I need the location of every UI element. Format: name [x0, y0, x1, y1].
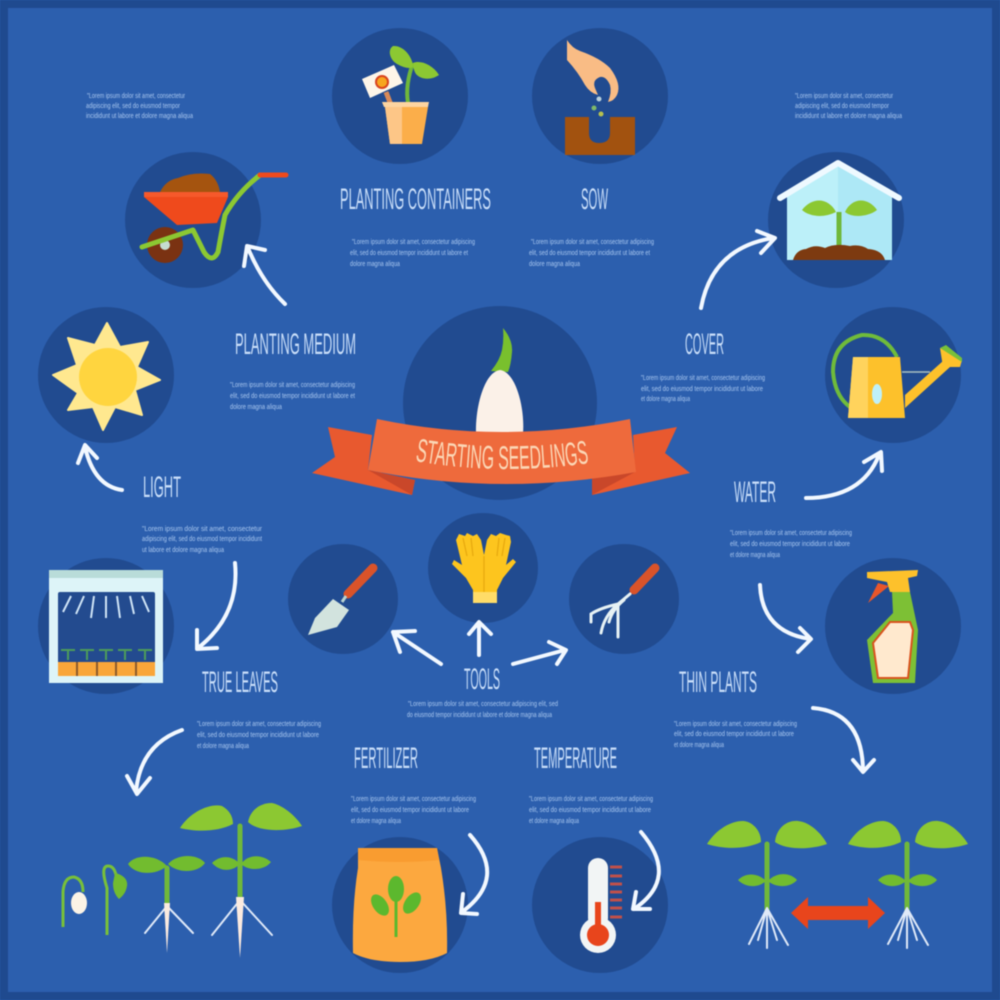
- text block: temperature: elit, sed do eiusmod tempor incididunt ut labore: [529, 807, 651, 814]
- text block: true leaves: "Lorem ipsum dolor sit amet, consectetur adipiscing: [197, 721, 321, 728]
- text: TEMPERATURE: [534, 742, 617, 775]
- panel: sow: [529, 28, 668, 268]
- panel: growth stages of seedling: [63, 803, 302, 958]
- panel: trowel: [288, 544, 398, 654]
- text block: cover: [641, 375, 765, 403]
- text: THIN PLANTS: [679, 666, 757, 699]
- icon: sprout with folded leaf: [104, 866, 127, 935]
- text block: water: "Lorem ipsum dolor sit amet, consectetur adipiscing: [730, 530, 852, 537]
- panel: gloves: [428, 513, 538, 623]
- text block: planting medium: dolore magna aliqua: [230, 404, 282, 411]
- icon: sun: [53, 323, 160, 430]
- icon: gloves: [452, 533, 516, 603]
- panel: centre title: [312, 306, 690, 500]
- text block: planting medium: elit, sed do eiusmod tempor incididunt ut labore et: [230, 393, 355, 400]
- text block: top right: adipiscing elit, sed do eiusmod tempor: [795, 103, 890, 110]
- text block: fertilizer: elit, sed do eiusmod tempor incididunt ut labore: [351, 807, 469, 814]
- panel: watering can: [825, 307, 962, 443]
- arrow: tools to trowel: [393, 631, 441, 664]
- text block: top left: "Lorem ipsum dolor sit amet, consectetur: [87, 93, 186, 100]
- icon: fertilizer bag: [353, 848, 447, 962]
- panel: thermometer: [532, 837, 668, 973]
- text block: thin plants: et dolore magna aliqua: [674, 742, 724, 749]
- text block: fertilizer: [351, 796, 476, 825]
- banner: left tail: [312, 427, 415, 495]
- panel: sun: [38, 307, 174, 443]
- text: PLANTING MEDIUM: [235, 328, 356, 361]
- arrow: light to true leaves: [197, 563, 236, 649]
- arrow: temperature: [633, 832, 659, 909]
- text block: water: et dolore magna aliqua: [730, 552, 780, 559]
- text: TOOLS: [464, 663, 500, 696]
- arrow: thin plants: [813, 708, 874, 772]
- text block: fertilizer: "Lorem ipsum dolor sit amet, consectetur adipiscing: [351, 796, 476, 803]
- text block: planting medium: "Lorem ipsum dolor sit amet, consectetur adipiscing: [230, 382, 355, 389]
- banner: ribbon: [368, 419, 636, 484]
- text block: true leaves: et dolore magna aliqua: [197, 743, 249, 750]
- icon: sprouting seed: [476, 328, 523, 434]
- text block: temperature: [529, 796, 653, 825]
- text: PLANTING CONTAINERS: [340, 183, 491, 216]
- banner: right tail: [592, 427, 690, 495]
- icon: mature seedling: [180, 803, 302, 958]
- text block: light: [142, 526, 263, 554]
- arrow: water to can: [806, 452, 882, 498]
- arrow: medium to wheelbarrow: [244, 246, 285, 304]
- icon: wheelbarrow: [142, 174, 286, 263]
- text block: temperature: "Lorem ipsum dolor sit amet, consectetur adipiscing: [529, 796, 653, 803]
- text block: top right: "Lorem ipsum dolor sit amet, consectetur: [795, 93, 894, 100]
- text block: cover: elit, sed do eiusmod tempor incididunt ut labore: [641, 386, 763, 393]
- panel: sow: SOW: [581, 183, 608, 216]
- icon: plant left: [707, 821, 827, 948]
- root: main taproot: [236, 897, 244, 958]
- icon: greenhouse: [780, 163, 899, 260]
- text block: thin plants: "Lorem ipsum dolor sit amet, consectetur adipiscing: [674, 721, 797, 728]
- arrow: true leaves to seedlings: [127, 730, 182, 794]
- panel: fertilizer bag: [332, 837, 468, 973]
- text block: true leaves: elit, sed do eiusmod tempor incididunt ut labore: [197, 732, 319, 739]
- icon: thermometer: [580, 858, 622, 953]
- icon: rake: [591, 568, 655, 637]
- panel: grow lamp box: [38, 558, 174, 694]
- text block: water: elit, sed do eiusmod tempor incididunt ut labore: [730, 541, 850, 548]
- icon: plant right: [848, 821, 968, 948]
- text block: elit, sed do eiusmod tempor incididunt ut labore et: [529, 250, 650, 257]
- root: taproot: [164, 903, 170, 953]
- text: TRUE LEAVES: [202, 666, 278, 699]
- panel: planting containers: [332, 28, 491, 268]
- icon: grow lamp box: [49, 570, 163, 683]
- arrow: spacing double arrow: [791, 897, 885, 929]
- arrow: tools to gloves: [469, 622, 491, 655]
- text block: fertilizer: et dolore magna aliqua: [351, 818, 401, 825]
- text: COVER: [685, 328, 724, 361]
- text block: planting medium: [230, 382, 355, 411]
- text block: thin plants: elit, sed do eiusmod tempor incididunt ut labore: [674, 731, 794, 738]
- text block: light: ut labore et dolore magna aliqua: [142, 547, 224, 554]
- text block: top left: [86, 93, 193, 120]
- text block: dolore magna aliqua: [529, 261, 580, 268]
- arrow: tools to rake: [513, 642, 566, 664]
- text block: "Lorem ipsum dolor sit amet, consectetur adipiscing: [352, 239, 475, 246]
- title: STARTING SEEDLINGS: [416, 438, 588, 470]
- text block: top right: incididunt ut labore et dolore magna aliqua: [795, 113, 902, 120]
- text: LIGHT: [143, 471, 181, 504]
- arrow: light to sun: [78, 445, 122, 490]
- icon: spray bottle: [867, 570, 918, 683]
- text block: temperature: et dolore magna aliqua: [529, 818, 579, 825]
- text block: thin plants: [674, 721, 797, 749]
- icon: sprout with seed: [63, 877, 87, 927]
- icon: young seedling: [128, 856, 205, 953]
- text: FERTILIZER: [354, 742, 418, 775]
- text block: true leaves: [197, 721, 321, 750]
- text block: tools: do eiusmod tempor incididunt ut labore et dolore magna aliqua: [407, 712, 552, 719]
- arrow: water to spray bottle: [760, 585, 811, 652]
- panel: greenhouse: [768, 152, 904, 288]
- text block: light: "Lorem ipsum dolor sit amet, consectetur: [142, 526, 263, 533]
- banner: fold shading: [368, 470, 635, 495]
- icon: watering can: [833, 335, 962, 418]
- text block: cover: et dolore magna aliqua: [641, 396, 690, 403]
- icon: hand sowing seeds: [565, 40, 635, 155]
- panel: spray bottle: [825, 558, 961, 694]
- text block: [350, 239, 475, 268]
- text block: top left: adipiscing elit, sed do eiusmod tempor: [86, 103, 181, 110]
- text block: water: [730, 530, 852, 559]
- panel: thinned plants spacing: [707, 821, 968, 948]
- icon: trowel: [308, 568, 373, 635]
- text block: dolore magna aliqua: [350, 261, 400, 268]
- text block: tools: [407, 701, 558, 719]
- text block: light: adipiscing elit, sed do eiusmod tempor incididunt: [142, 536, 262, 543]
- text block: top right: [795, 93, 902, 120]
- panel: wheelbarrow: [125, 152, 286, 288]
- arrow: cover to greenhouse: [701, 231, 775, 308]
- text: WATER: [734, 476, 776, 509]
- text block: top left: incididunt ut labore et dolore magna aliqua: [86, 113, 193, 120]
- text block: "Lorem ipsum dolor sit amet, consectetur adipiscing: [531, 239, 654, 246]
- panel: rake: [569, 544, 679, 654]
- text block: [529, 239, 654, 268]
- arrow: fertilizer: [461, 835, 487, 914]
- text block: cover: "Lorem ipsum dolor sit amet, consectetur adipiscing: [641, 375, 765, 382]
- icon: seedling in pot: [362, 46, 439, 144]
- text block: elit, sed do eiusmod tempor incididunt ut labore et: [350, 250, 468, 257]
- text block: tools: "Lorem ipsum dolor sit amet, consectetur adipiscing elit, sed: [408, 701, 558, 708]
